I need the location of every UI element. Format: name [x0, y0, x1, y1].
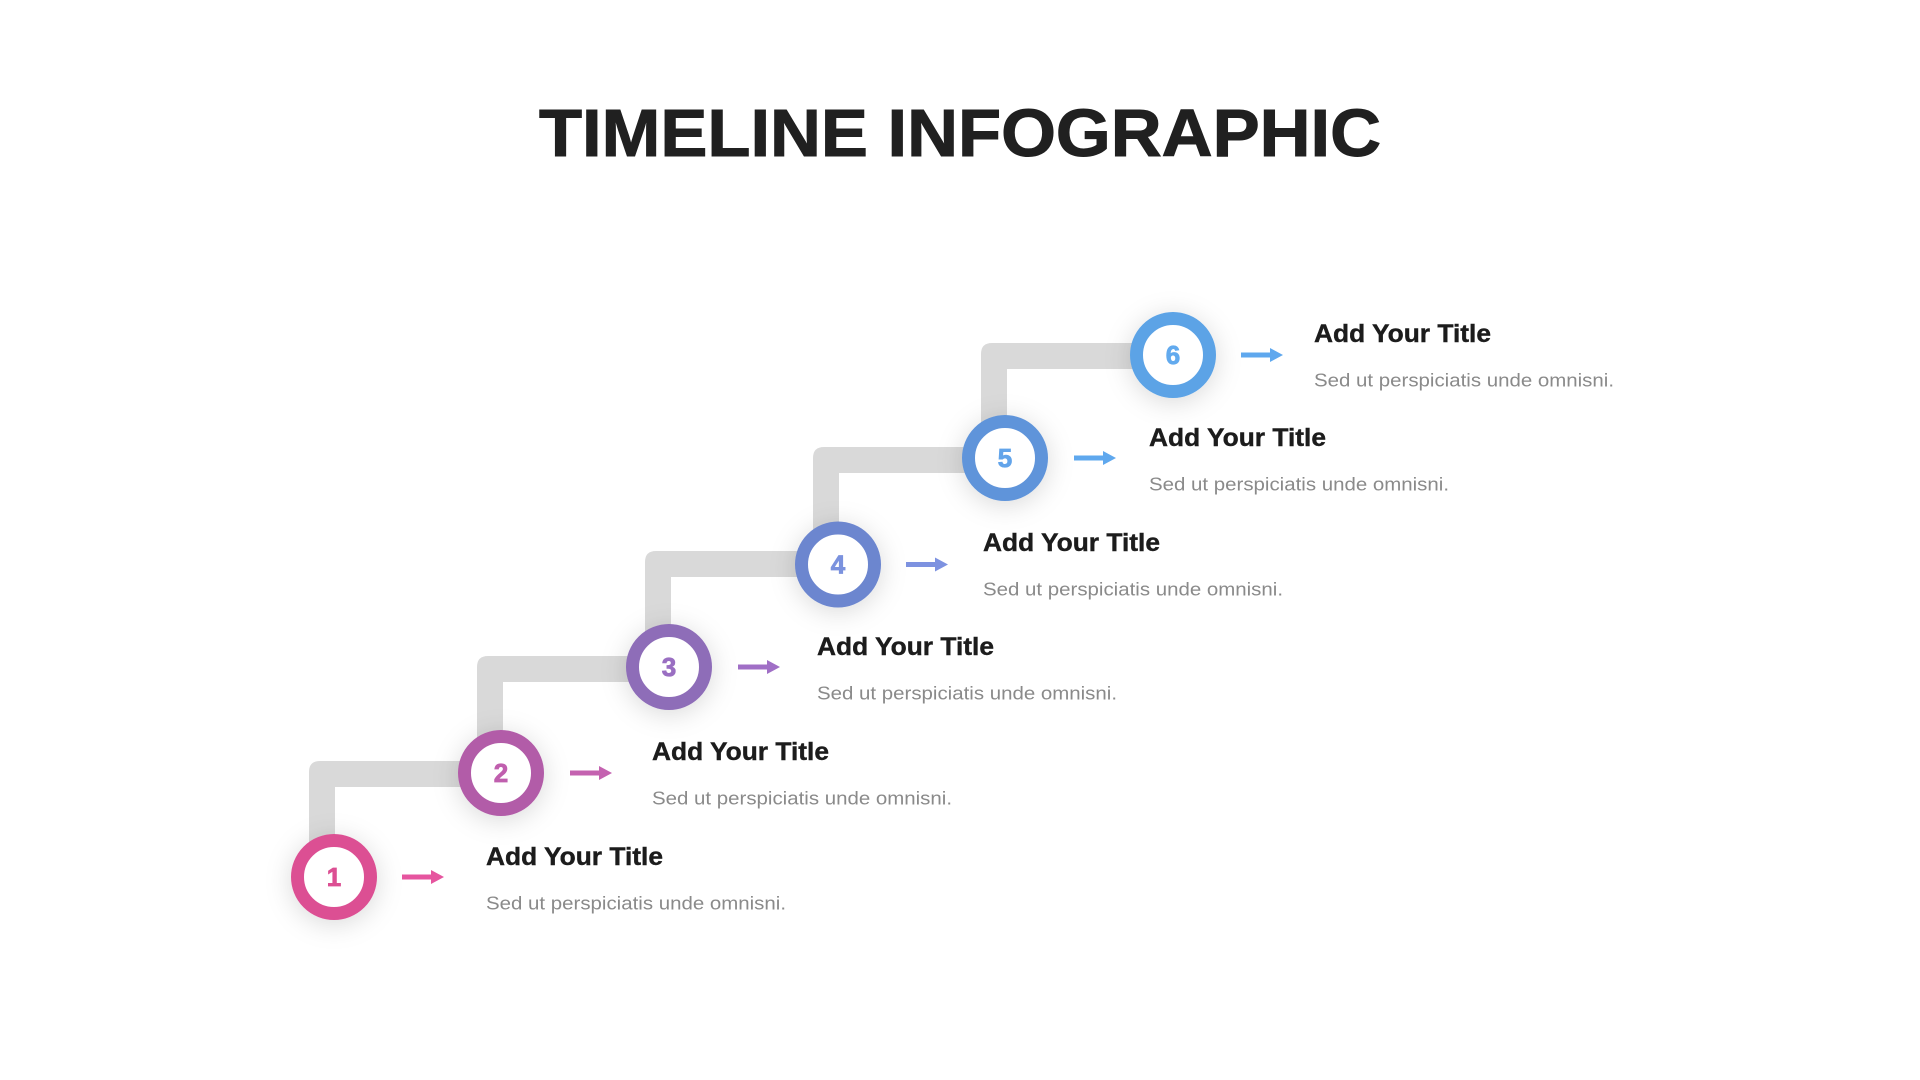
connector: step 3 to 4	[645, 551, 838, 667]
arrow 6	[1241, 348, 1283, 362]
text 4	[983, 529, 1283, 600]
node 5	[968, 422, 1042, 494]
text 6: Add Your Title	[1314, 320, 1491, 348]
node 3: 3	[662, 652, 676, 682]
text 5	[1149, 424, 1449, 494]
text 2	[652, 738, 952, 808]
step 4	[802, 528, 1283, 601]
step 6	[1136, 318, 1614, 392]
node 2: 2	[494, 758, 508, 788]
step 3	[632, 630, 1117, 704]
text 4: Sed ut perspiciatis unde omnisni.	[983, 578, 1283, 600]
title: TIMELINE INFOGRAPHIC	[539, 96, 1381, 171]
node 4	[802, 528, 874, 601]
step 1	[298, 840, 786, 914]
text 2: Add Your Title	[652, 738, 829, 766]
text 6	[1314, 320, 1614, 390]
step 5	[968, 422, 1449, 494]
text 3: Sed ut perspiciatis unde omnisni.	[817, 682, 1117, 704]
node 3	[632, 630, 706, 704]
text 1: Add Your Title	[486, 843, 663, 871]
text 4: Add Your Title	[983, 529, 1160, 557]
text 3	[817, 633, 1117, 704]
text 2: Sed ut perspiciatis unde omnisni.	[652, 788, 952, 808]
text 5: Sed ut perspiciatis unde omnisni.	[1149, 474, 1449, 494]
arrow 3	[738, 660, 780, 674]
arrow 5	[1074, 451, 1116, 465]
node 5: 5	[998, 443, 1012, 473]
text 1	[486, 843, 786, 914]
arrow 1	[402, 870, 444, 884]
arrow 2	[570, 766, 612, 780]
text 1: Sed ut perspiciatis unde omnisni.	[486, 892, 786, 914]
step 2	[464, 736, 952, 810]
connector: step 5 to 6	[981, 343, 1173, 458]
text 5: Add Your Title	[1149, 424, 1326, 452]
node 6: 6	[1166, 340, 1180, 370]
text 3: Add Your Title	[817, 633, 994, 661]
text 6: Sed ut perspiciatis unde omnisni.	[1314, 370, 1614, 390]
node 1: 1	[327, 862, 341, 892]
node 2	[464, 736, 538, 810]
connector: step 1 to 2	[309, 761, 501, 877]
node 1	[298, 840, 370, 914]
node 6	[1136, 318, 1210, 392]
arrow 4	[906, 558, 948, 572]
connector: step 2 to 3	[477, 656, 669, 773]
connector: step 4 to 5	[813, 447, 1005, 564]
node 4: 4	[831, 550, 846, 580]
